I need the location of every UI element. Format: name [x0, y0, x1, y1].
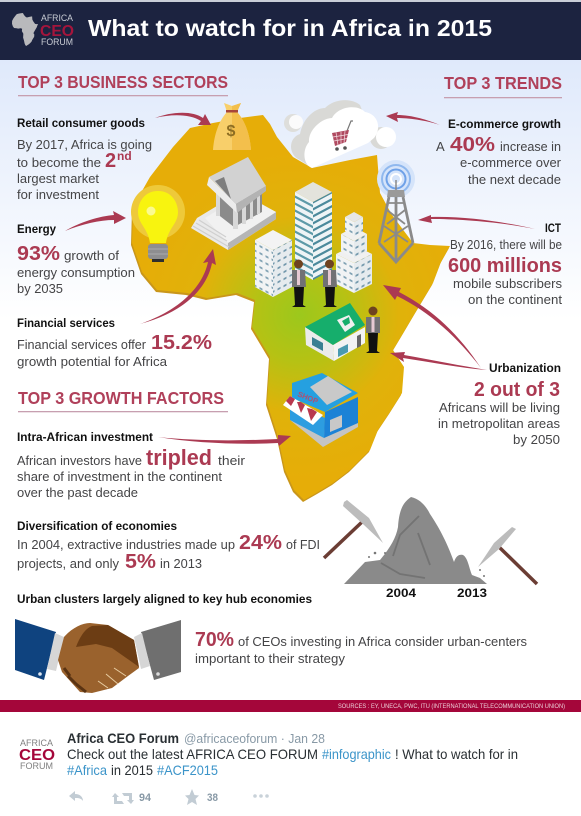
icon: shopping cart	[332, 121, 353, 151]
tweet message: #Africa	[67, 762, 107, 778]
tweet author line	[67, 730, 325, 746]
label: 2004: 2004	[386, 586, 416, 600]
header logo: AFRICA	[41, 13, 74, 24]
tweet avatar logo: CEO	[19, 747, 55, 764]
text: energy: growth of	[64, 248, 119, 263]
text: 70 percent of CEOs: important to their strategy	[195, 651, 346, 666]
text: intra-African investment: their	[218, 453, 246, 468]
arrow: financial services to bank	[140, 249, 216, 324]
text: financial services: 15.2%	[151, 332, 212, 354]
tweet avatar logo: FORUM	[20, 761, 53, 772]
tweet avatar logo: AFRICA	[20, 738, 54, 749]
text: intra-African investment: share of investment in the continent	[17, 469, 222, 484]
tweet message: Check out the latest AFRICA CEO FORUM	[67, 746, 318, 762]
icon: more dots	[253, 794, 269, 798]
icon: shop	[283, 373, 358, 447]
arrow: e-commerce to cloud	[386, 112, 440, 125]
text: retail consumer goods: for investment	[17, 187, 99, 202]
arrow: ICT to tower	[418, 215, 535, 229]
text: urban clusters heading: Urban clusters largely aligned to key hub economies	[17, 594, 312, 606]
text: 70 percent of CEOs: of CEOs investing in Africa consider urban-centers	[238, 634, 527, 649]
heading: top 3 trends: TOP 3 TRENDS	[444, 73, 562, 93]
text: financial services: growth potential for Africa	[17, 354, 168, 369]
icon: tall tower	[295, 182, 332, 280]
text: urbanization: 2 out of 3	[474, 379, 560, 401]
icon: light bulb	[131, 185, 185, 262]
icon: handshake	[15, 619, 181, 693]
icon: right building	[336, 212, 372, 293]
text: energy: Energy	[17, 224, 57, 236]
tweet author line: @africaceoforum · Jan 28	[184, 732, 325, 746]
tweet author line: Africa CEO Forum	[67, 730, 179, 746]
text: diversification of economies	[17, 521, 320, 573]
text: retail consumer goods: nd	[117, 149, 132, 163]
text: intra-African investment: African investors have	[17, 453, 142, 468]
icon: shop: SHOP	[296, 390, 319, 406]
arrow: energy to bulb	[65, 211, 126, 231]
text: intra-African investment: tripled	[146, 445, 212, 470]
text: financial services: Financial services	[17, 318, 115, 330]
heading: top 3 growth factors: TOP 3 GROWTH FACTORS	[18, 388, 224, 408]
text: ICT: By 2016, there will be	[450, 237, 562, 252]
arrow: intra-African investment to shop	[158, 435, 291, 446]
text: energy: 93%	[17, 243, 60, 265]
text: diversification of economies: Diversification of economies	[17, 521, 177, 533]
text: 70 percent of CEOs	[195, 629, 527, 666]
text: retail consumer goods: 2	[105, 150, 116, 172]
icon: house	[305, 303, 365, 361]
text: 70 percent of CEOs: 70%	[195, 629, 234, 651]
arrow: urbanization to house	[390, 352, 487, 370]
icon: left pickaxe	[324, 500, 386, 558]
text: diversification of economies: 24%	[239, 532, 282, 554]
tweet message: #infographic	[322, 746, 391, 762]
text: retail consumer goods: to become the	[17, 155, 101, 170]
text: ICT: mobile subscribers	[453, 276, 563, 291]
text: retail consumer goods	[17, 118, 152, 202]
header banner	[0, 0, 581, 60]
text: urbanization: Urbanization	[489, 363, 561, 375]
text: urbanization	[438, 363, 561, 447]
tweet message: ! What to watch for in	[395, 746, 518, 762]
icon: mountain and pickaxes	[324, 497, 537, 584]
text: retail consumer goods: By 2017, Africa is going	[17, 137, 152, 152]
text: energy: energy consumption	[17, 265, 135, 280]
text: retail consumer goods: largest market	[17, 171, 99, 186]
arrow: retail to money bag	[155, 113, 211, 125]
text: ICT: 600 millions	[448, 255, 562, 277]
text: energy: by 2035	[17, 281, 63, 296]
text: e-commerce growth	[436, 119, 562, 187]
text: diversification of economies: 5%	[125, 551, 156, 573]
icon: telecom tower	[377, 160, 415, 262]
text: diversification of economies: projects, and only	[17, 556, 119, 571]
text: urbanization: by 2050	[513, 432, 560, 447]
tweet avatar logo	[19, 738, 55, 772]
tweet message	[67, 746, 518, 778]
text: urbanization: Africans will be living	[439, 400, 560, 415]
text: e-commerce growth: A	[436, 139, 445, 154]
count: retweets: 94	[139, 792, 152, 804]
heading: top 3 business sectors: TOP 3 BUSINESS SECTORS	[18, 72, 228, 92]
text: intra-African investment: Intra-African investment	[17, 432, 153, 444]
sources bar	[0, 700, 581, 712]
arrow: urbanization to buildings	[383, 285, 481, 368]
count: favorites: 38	[207, 792, 218, 804]
icon: retweet	[112, 793, 134, 804]
icon: reply	[69, 791, 83, 801]
text: urbanization: in metropolitan areas	[438, 416, 560, 431]
text: ICT: ICT	[545, 223, 561, 235]
text: retail consumer goods: Retail consumer goods	[17, 118, 145, 130]
title: What to watch for in Africa in 2015	[88, 15, 492, 41]
icon: right pickaxe	[478, 527, 537, 584]
text: e-commerce growth: 40%	[450, 134, 495, 156]
label: 2013: 2013	[457, 586, 487, 600]
icon: money bag	[213, 103, 251, 150]
icon: business man left	[292, 260, 306, 307]
header logo	[12, 13, 74, 48]
icon: favorite star	[185, 789, 199, 805]
header logo: FORUM	[41, 37, 73, 48]
text: intra-African investment	[17, 432, 246, 500]
icon: business man by house	[366, 306, 380, 353]
icon: left building	[255, 230, 292, 297]
tweet message: in 2015	[111, 762, 153, 778]
text: diversification of economies: In 2004, extractive industries made up	[17, 537, 235, 552]
text: intra-African investment: over the past decade	[17, 485, 138, 500]
text: e-commerce growth: e-commerce over	[460, 155, 562, 170]
text: e-commerce growth: E-commerce growth	[448, 119, 561, 131]
tweet message: #ACF2015	[157, 762, 218, 778]
header logo: CEO	[40, 23, 74, 40]
text: diversification of economies: of FDI	[286, 537, 320, 552]
icon: bank building	[191, 157, 276, 250]
text: financial services	[17, 318, 212, 369]
text: e-commerce growth: increase in	[500, 139, 561, 154]
icon: business man right	[323, 260, 337, 307]
text: ICT	[448, 223, 563, 307]
text: e-commerce growth: the next decade	[468, 172, 561, 187]
infographic background	[0, 60, 581, 320]
tweet actions	[69, 789, 269, 805]
text: ICT: on the continent	[468, 292, 562, 307]
icon: money bag: $	[226, 123, 236, 140]
text: diversification of economies: in 2013	[160, 556, 202, 571]
text: energy	[17, 224, 135, 296]
text: financial services: Financial services offer	[17, 337, 147, 352]
icon: cloud with cart	[284, 100, 396, 168]
map of Africa	[131, 115, 450, 502]
